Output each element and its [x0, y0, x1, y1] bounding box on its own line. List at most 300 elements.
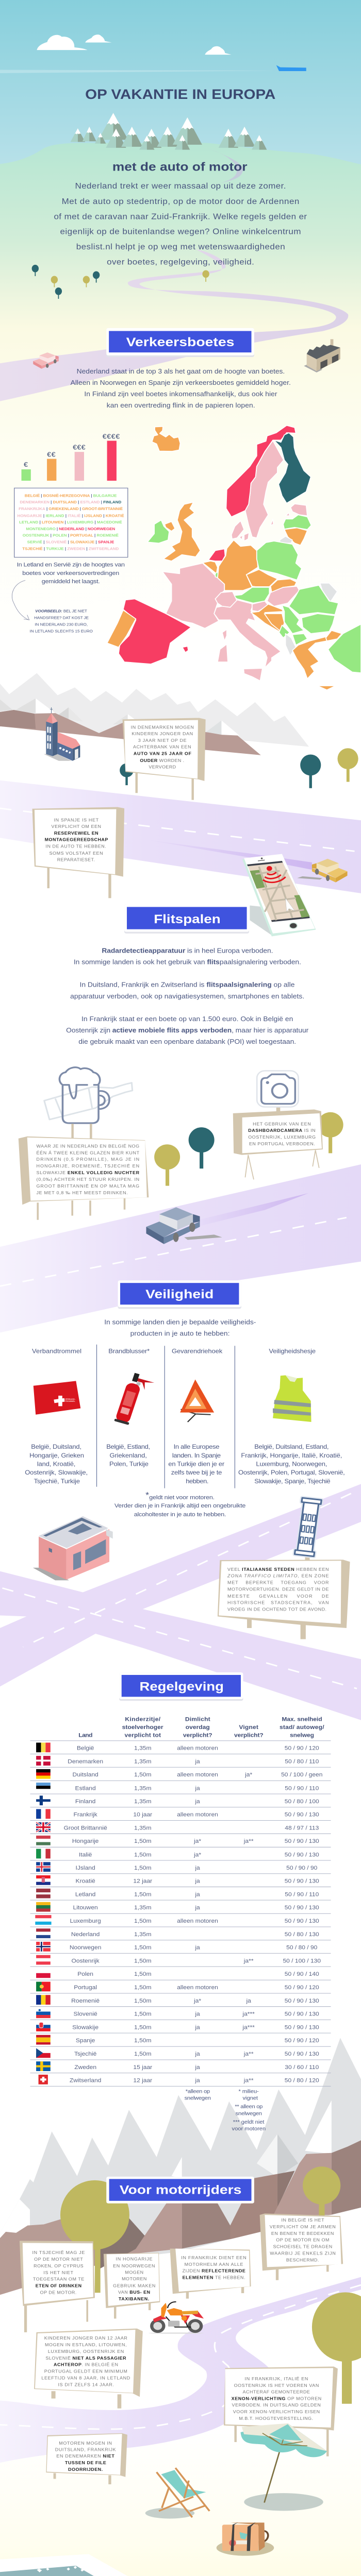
sign: flitspalen	[124, 905, 249, 934]
row: Portugal	[36, 1982, 319, 1991]
winding road near	[0, 249, 348, 401]
legend box: countries: FRANKRIJKA | GRIEKENLAND | GROOT-BRITTANNIË	[19, 507, 123, 511]
sign: xenon: VOOR XENON-VERLICHTING EISEN	[233, 2409, 320, 2414]
background: sky	[0, 0, 361, 178]
row: Hongarije: ja**	[243, 1839, 254, 1844]
column: verbandtrommel	[25, 1348, 88, 1485]
table footnote: vignet: *** geldt niet	[233, 2119, 265, 2125]
sign: hongarije: MOTOREN	[122, 2276, 146, 2281]
text: veiligheid intro: In sommige landen dien je bepaalde veiligheids-	[104, 1318, 256, 1326]
bar chart: boete level: €€€€	[103, 433, 120, 440]
row: Roemenië: Roemenië	[71, 1998, 100, 2004]
row: Italië: Italië	[79, 1852, 92, 1858]
sign: xenon: VERBODEN. IN DUITSLAND GELDEN	[232, 2402, 321, 2408]
row: Kroatië: Kroatië	[76, 1878, 95, 1885]
column: brandblusser: Polen, Turkije	[109, 1461, 149, 1467]
row: Spanje	[36, 2035, 319, 2045]
row: Portugal: Portugal	[74, 1985, 97, 1991]
row: Kroatië: 50 / 90 / 130	[285, 1878, 319, 1885]
sign: hongarije: TAXIBANEN.	[119, 2296, 149, 2301]
sign: alcohol: (0,0‰) ACHTER HET STUUR KRUIPEN. IN	[37, 1177, 139, 1182]
row: Italië: ja*	[193, 1852, 202, 1858]
text: radar detection: In sommige landen is ook het gebruik van flitspaalsignalering verboden.	[74, 958, 301, 965]
row: Zweden: Zweden	[74, 2064, 96, 2071]
column: veiligheidshesje: Oostenrijk, Polen, Portugal, Slovenië,	[238, 1469, 345, 1476]
sign: hongarije: EN NOORWEGEN	[113, 2263, 155, 2268]
row: Tsjechië: 1,50m	[134, 2052, 152, 2057]
sign: tsjechie: OP DE MOTOR NIET	[34, 2257, 84, 2262]
bar chart: boete level: €	[24, 461, 28, 468]
column dividers	[97, 1345, 235, 1488]
row: Frankrijk	[36, 1809, 319, 1819]
table header: Vignet	[239, 1724, 258, 1731]
row: Spanje: Spanje	[76, 2038, 95, 2044]
trees	[32, 265, 209, 299]
sign: frankrijk helm: ELEMENTEN TE HEBBEN.	[183, 2275, 245, 2280]
sign: regelgeving: Regelgeving	[140, 1680, 224, 1693]
icon: bottle	[44, 1083, 133, 1120]
header scene and intro	[0, 35, 361, 659]
sign: italie	[218, 1555, 350, 1639]
row: Frankrijk: Frankrijk	[74, 1812, 97, 1818]
row: Slovenië: Slovenië	[74, 2011, 97, 2018]
row: Estland: ja	[194, 1786, 200, 1791]
road crossing	[0, 1484, 361, 1720]
row: Hongarije: Hongarije	[72, 1839, 99, 1844]
text: lowest fines: gemiddeld het laagst.	[42, 578, 100, 585]
tree: right	[303, 2166, 340, 2216]
row: Denemarken: Denemarken	[68, 1759, 103, 1765]
sign: alcohol: ÉÉN Á TWEE KLEINE GLAZEN BIER KUNT	[37, 1150, 140, 1155]
row: Kroatië: ja	[194, 1878, 200, 1885]
sign: tsjechie: OP DE MOTOR.	[40, 2290, 76, 2295]
car trail	[150, 840, 312, 870]
panel: alcohol and dashcam	[0, 993, 361, 1333]
row: Groot Brittannië: Groot Brittannië	[63, 1825, 107, 1831]
sign: file: MOTOREN MOGEN IN	[59, 2441, 112, 2446]
tree: small teal	[120, 764, 134, 785]
text: flitspalen continued: In Frankrijk staat er een boete op van 1.500 euro. Ook in België en	[81, 1015, 293, 1023]
sign: dashcam: DASHBOARDCAMERA IS IN	[248, 1128, 316, 1133]
row: Slovenië: 50 / 90 / 130	[285, 2011, 319, 2018]
table header: stad/ autoweg/	[280, 1724, 324, 1731]
row: Finland: 1,35m	[134, 1799, 152, 1805]
row: Hongarije	[36, 1836, 319, 1845]
sign: italie: VROEG IN DE OCHTEND TOT DE AVOND.	[227, 1607, 326, 1612]
row: Noorwegen	[36, 1942, 317, 1952]
grey mountain range	[0, 673, 309, 747]
car: pink	[33, 352, 59, 369]
sign: hongarije: VAN BUS- EN	[118, 2290, 150, 2295]
row: Duitsland: 50 / 100 / geen	[281, 1772, 322, 1778]
road	[0, 781, 361, 893]
table header: Kinderzitje/	[125, 1717, 161, 1722]
sign: spanje: REPARATIESET.	[57, 857, 95, 862]
cloud left	[37, 35, 88, 50]
sign: dashcam: HET GEBRUIK VAN EEN	[253, 1122, 311, 1126]
row: Roemenië: 1,50m	[134, 1998, 152, 2004]
intro text: Nederland trekt er weer massaal op uit deze zomer.	[75, 182, 286, 191]
sign: italie: MOTORVOERTUIGEN. DEZE GELDT IN DE	[227, 1587, 329, 1592]
row: Slowakije: 1,50m	[134, 2025, 152, 2030]
sign: alcohol: SLOWAKIJE ENKEL VOLLEDIG NUCHTER	[37, 1170, 139, 1175]
sign: denemarken: 3 JAAR NIET OP DE	[138, 738, 187, 743]
row: Finland: 50 / 80 / 100	[285, 1799, 319, 1805]
row: IJsland: 1,50m	[134, 1865, 152, 1871]
cloud middle	[85, 35, 112, 42]
text: radar detection: Radardetectieapparatuur is in heel Europa verboden.	[102, 947, 273, 954]
row: Litouwen: Litouwen	[73, 1905, 98, 1911]
row: Luxemburg: Luxemburg	[70, 1919, 101, 1924]
sign: frankrijk helm	[170, 2248, 251, 2299]
table footnote: dimlicht	[185, 2089, 211, 2101]
icon: motorcycle	[149, 2302, 204, 2334]
row: Roemenië: 50 / 90 / 130	[285, 1998, 319, 2004]
row: Slowakije: ja	[194, 2025, 200, 2030]
icon: suitcase	[217, 2522, 274, 2556]
sign: frankrijk helm: MOTORHELM AAN ALLE	[185, 2262, 243, 2267]
column: veiligheidshesje: Slowakije, Spanje, Tsjechië	[254, 1478, 331, 1485]
row: Polen: Polen	[77, 1972, 93, 1977]
road markings	[2, 1494, 357, 1689]
sign: dashcam: EN PORTUGAL VERBODEN.	[249, 1141, 315, 1146]
row: Noorwegen: 1,50m	[134, 1945, 152, 1951]
title: OP VAKANTIE IN EUROPA	[85, 86, 275, 102]
text: flitspalen continued: Oostenrijk zijn actieve mobiele flits apps verboden, maar hier is apparatuur	[66, 1027, 309, 1034]
sign: kinderen achterop: LUXEMBURG, OOSTENRIJK EN	[48, 2349, 124, 2354]
intro text: over boetes, regelgeving, veiligheid.	[107, 258, 254, 266]
ground white	[0, 2208, 361, 2336]
table header: overdag	[186, 1724, 210, 1731]
column: veiligheidshesje: Luxemburg, Noorwegen,	[256, 1461, 327, 1467]
table header: snelweg	[290, 1733, 314, 1738]
row: Slowakije	[36, 2022, 319, 2031]
row: Nederland: 50 / 80 / 130	[285, 1931, 319, 1938]
column: verbandtrommel: België, Duitsland,	[31, 1444, 81, 1450]
table footnote: dimlicht: *alleen op	[186, 2089, 210, 2094]
sign: italie: ZONA TRAFFICO LIMITATO, EEN ZONE	[227, 1573, 329, 1579]
sign: frankrijk helm: ZIJDEN REFLECTERENDE	[183, 2268, 245, 2274]
sign: belgie: OP DE MOTOR EN OM	[276, 2238, 329, 2243]
row: Portugal: 50 / 90 / 120	[285, 1985, 319, 1991]
panel: mountains and flitspalen	[0, 673, 361, 988]
row: Zweden: 15 jaar	[133, 2064, 152, 2071]
sign: spanje: VERPLICHT OM EEN	[52, 824, 101, 829]
row: Frankrijk: 10 jaar	[133, 1812, 152, 1818]
foam spray	[37, 2566, 355, 2576]
table header: verplicht?	[183, 1733, 212, 1738]
intro text: beslist.nl helpt je op weg met wetenswaardigheden	[76, 243, 285, 251]
row: Estland: Estland	[75, 1786, 96, 1791]
sign: denemarken: KINDEREN JONGER DAN	[132, 731, 193, 736]
row: Groot Brittannië	[36, 1822, 319, 1832]
column: verbandtrommel: land, Kroatië,	[37, 1461, 75, 1467]
building pink	[33, 1516, 113, 1580]
panel: veiligheid	[0, 1318, 361, 1720]
column: gevarendriehoek: In alle Europese	[174, 1444, 220, 1450]
car: blue	[146, 1207, 222, 1244]
legend box: countries: SERVIË | SLOVENIË | SLOWAKIJE | SPANJE	[27, 540, 114, 545]
row: België	[36, 1742, 319, 1752]
row: Letland: ja	[194, 1892, 200, 1897]
row: IJsland	[36, 1862, 317, 1872]
row: Spanje: 50 / 90 / 120	[285, 2038, 319, 2044]
sign: belgie: EN BENEN TE BEDEKKEN	[271, 2231, 334, 2236]
row: Finland	[36, 1795, 319, 1805]
legend box: countries	[14, 488, 128, 557]
table header: verplicht?	[234, 1733, 264, 1738]
column: verbandtrommel: Verbandtrommel	[32, 1348, 81, 1354]
intro text: Met de auto op stedentrip, op de motor door de Ardennen	[62, 197, 299, 206]
row: Luxemburg	[35, 1915, 319, 1925]
sign: belgie: BESCHERMD.	[286, 2258, 319, 2262]
sign: kinderen achterop: KINDEREN JONGER DAN 12 JAAR	[44, 2335, 127, 2341]
text: flitspalen continued	[66, 993, 309, 1045]
row: IJsland: ja	[194, 1865, 200, 1871]
scene: alpine mountains	[0, 2038, 361, 2336]
car: yellow	[297, 859, 348, 883]
row: Estland: 50 / 90 / 110	[285, 1786, 319, 1791]
sea shallow	[0, 2566, 361, 2576]
row: Tsjechië: 50 / 90 / 130	[285, 2052, 319, 2057]
text: radar detection: In Duitsland, Frankrijk en Zwitserland is flitspaalsignalering op alle	[79, 981, 294, 988]
row: Duitsland: 1,50m	[134, 1772, 152, 1778]
subtitle: met de auto of motor	[112, 160, 247, 174]
sign: alcohol: JE MET 0,8 ‰ HET MEEST DRINKEN.	[37, 1190, 128, 1195]
sign: frankrijk helm: IN FRANKRIJK DIENT EEN	[181, 2255, 247, 2260]
sign: regelgeving	[119, 1672, 243, 1701]
row: Duitsland: Duitsland	[73, 1772, 99, 1778]
table footnote: vignet: * milieu-	[239, 2089, 259, 2094]
text: lowest fines: boetes voor verkeersovertredingen	[22, 569, 119, 577]
bar chart: boete level: €€	[47, 451, 56, 458]
icon: camera	[257, 1071, 299, 1113]
sign: xenon: ACHTERAF GEMONTEERDE	[243, 2389, 310, 2395]
row: Denemarken: 1,35m	[134, 1759, 152, 1765]
row: Spanje: 1,50m	[134, 2038, 152, 2044]
row: Letland	[36, 1889, 319, 1898]
footnote: *	[145, 1490, 149, 1500]
row: Hongarije: 1,50m	[134, 1839, 152, 1844]
row: Tsjechië: Tsjechië	[74, 2052, 96, 2057]
table header: Max. snelheid	[282, 1717, 322, 1722]
row: Zwitserland	[39, 2075, 319, 2084]
row: Hongarije: ja*	[193, 1839, 202, 1844]
sign: kinderen achterop: PORTUGAL GELDT EEN MINIMUM	[44, 2369, 127, 2374]
text: flitspalen continued: die gebruik maakt van een openbare databank (POI) wel toegestaan.	[78, 1038, 296, 1045]
bar chart: boete level: €€€	[73, 444, 86, 451]
sign: belgie	[260, 2213, 343, 2280]
text: boetes intro	[71, 367, 291, 409]
text: boetes intro: In Finland zijn veel boetes inkomensafhankelijk, dus ook hier	[84, 391, 277, 398]
sign: veiligheid: Veiligheid	[145, 1287, 214, 1301]
row: Hongarije: 50 / 90 / 130	[285, 1839, 319, 1844]
sign: kinderen achterop: LEEFTIJD VAN 8 JAAR, IN LETLAND	[41, 2376, 130, 2380]
column: brandblusser: België, Estland,	[106, 1444, 150, 1450]
sign: spanje: MONTAGEGEREEDSCHAP	[45, 837, 108, 842]
row: Groot Brittannië: 48 / 97 / 113	[285, 1825, 319, 1831]
brown mountains	[0, 710, 261, 755]
arrow: example	[12, 581, 29, 620]
text: veiligheid intro	[104, 1318, 256, 1337]
sign: alcohol: GROOT BRITTANNIË EN OP MALTA MAG	[37, 1183, 139, 1189]
row: Portugal: alleen motoren	[177, 1985, 218, 1991]
text: boetes intro: Nederland staat in de top 3 als het gaat om de hoogte van boetes.	[77, 367, 285, 375]
row: Noorwegen: Noorwegen	[70, 1945, 101, 1951]
row: IJsland: IJsland	[76, 1865, 95, 1871]
sign: denemarken	[123, 718, 206, 800]
sign: dashcam	[233, 1109, 323, 1179]
row: Groot Brittannië: 1,35m	[134, 1825, 152, 1831]
text: voorbeeld: IN NEDERLAND 230 EURO,	[35, 622, 88, 626]
table header	[78, 1717, 324, 1738]
table footnote: dimlicht: snelwegen	[185, 2095, 211, 2101]
table header: stoelverhoger	[122, 1724, 163, 1731]
row: Frankrijk: 50 / 90 / 130	[285, 1812, 319, 1818]
grey peaks	[0, 699, 140, 725]
row: Litouwen: 1,35m	[134, 1905, 152, 1911]
sign: hongarije: MOGEN	[125, 2270, 143, 2275]
sign: xenon: IN FRANKRIJK, ITALIË EN	[245, 2376, 308, 2381]
sign: tsjechie: TOEGESTAAN OM TE	[33, 2277, 85, 2281]
row: Portugal: 1,50m	[134, 1985, 152, 1991]
sign: belgie: VERPLICHT OM JE ARMEN	[270, 2224, 336, 2229]
row: Litouwen: ja	[194, 1905, 200, 1911]
row: Letland: 1,50m	[134, 1892, 152, 1897]
column: gevarendriehoek: en Turkije dien je er	[168, 1461, 224, 1467]
column: gevarendriehoek: Gevarendriehoek	[172, 1348, 223, 1354]
sign: veiligheid	[118, 1280, 241, 1309]
row: Roemenië	[36, 1995, 319, 2005]
intro text: of met de caravan naar Zuid-Frankrijk. Welke regels gelden er	[54, 212, 307, 221]
row: Letland: Letland	[75, 1892, 95, 1897]
brown mountain shade	[0, 710, 36, 729]
row: Noorwegen: ja	[194, 1945, 200, 1951]
row: Luxemburg: 50 / 90 / 130	[285, 1919, 319, 1924]
sign: flitspalen: Flitspalen	[154, 912, 221, 926]
row: Frankrijk: alleen motoren	[177, 1812, 218, 1818]
row: Zwitserland: ja**	[243, 2078, 254, 2083]
table footnote: vignet: voor motoren	[232, 2126, 266, 2132]
sign: kinderen achterop: MOGEN IN ESTLAND, LITOUWEN,	[45, 2342, 127, 2347]
sign: file: DOORRIJDEN.	[68, 2467, 103, 2472]
column: brandblusser: Griekenland,	[110, 1452, 147, 1459]
footnote: geldt niet voor motoren.	[149, 1494, 215, 1501]
sign: belgie: IN BELGIË IS HET	[282, 2217, 324, 2223]
sign: denemarken: OUDER WORDEN .	[140, 758, 184, 763]
row: België: 50 / 90 / 120	[285, 1745, 319, 1752]
row: Estland: 1,35m	[134, 1786, 152, 1791]
sign: spanje: SOMS VOLSTAAT EEN	[50, 851, 103, 856]
sign: spanje	[32, 807, 124, 898]
table header: verplicht tot	[125, 1733, 161, 1738]
sign: italie: MET BEPERKTE TOEGANG VOOR	[227, 1580, 329, 1585]
row: Denemarken	[36, 1756, 319, 1766]
row: Estland	[36, 1783, 319, 1791]
sign: denemarken: AUTO VAN 25 JAAR OF	[134, 751, 191, 756]
sign: alcohol: DRINKEN (0,5 PROMILLE), MAG JE IN	[37, 1157, 139, 1162]
row: Zweden: 30 / 60 / 110	[285, 2064, 319, 2071]
legend box: countries: TSJECHIË | TURKIJE | ZWEDEN | ZWITSERLAND	[22, 547, 119, 551]
sign: kinderen achterop: ACHTEROP. IN BELGIË EN	[54, 2362, 118, 2367]
table header: Dimlicht	[185, 1717, 210, 1722]
table footnote: vignet: snelwegen	[236, 2111, 262, 2116]
intro text	[54, 182, 307, 266]
row: Oostenrijk: 1,50m	[134, 1958, 152, 1964]
row: Luxemburg: alleen motoren	[177, 1919, 218, 1924]
sky streak	[0, 70, 276, 73]
sign: tsjechie: IS HET NIET	[43, 2270, 74, 2275]
sign: tsjechie: ETEN OF DRINKEN	[36, 2283, 81, 2288]
row: Slowakije: Slowakije	[72, 2025, 99, 2030]
legend box: countries: LETLAND | LITOUWEN | LUXEMBURG | MACEDONIË	[19, 520, 122, 524]
row: Oostenrijk: 50 / 100 / 130	[283, 1958, 321, 1964]
sign: italie: HISTORISCHE STADSCENTRA, VAN	[227, 1600, 329, 1605]
row: Oostenrijk: Oostenrijk	[72, 1958, 100, 1964]
column: gevarendriehoek: hebben.	[186, 1478, 208, 1485]
row: Slovenië	[36, 2009, 319, 2018]
text: flitspalen continued: apparatuur verboden, ook op navigatiesystemen, smartphones en tablets.	[70, 993, 304, 1000]
row: Duitsland	[36, 1769, 322, 1779]
row: Slowakije: ja***	[242, 2025, 255, 2030]
row: Zwitserland: 12 jaar	[133, 2078, 152, 2083]
row: Noorwegen: 50 / 80 / 90	[286, 1945, 317, 1951]
sign: denemarken: ACHTERBANK VAN EEN	[133, 744, 191, 750]
row: Polen	[36, 1972, 319, 1978]
panel: motorrijders continued and beach	[0, 2277, 361, 2576]
row: Italië: 50 / 90 / 130	[285, 1852, 319, 1858]
sign: xenon	[224, 2366, 338, 2456]
sign: xenon: M.B.T. HOOGTEVERSTELLING.	[239, 2416, 313, 2421]
row: Zwitserland: 50 / 80 / 120	[285, 2078, 319, 2083]
sign: voor motorrijders: Voor motorrijders	[120, 2183, 241, 2197]
row: Tsjechië: ja	[194, 2052, 200, 2057]
bar chart: boete level	[22, 433, 120, 481]
row: Denemarken: 50 / 80 / 110	[285, 1759, 319, 1765]
row: Finland: Finland	[75, 1799, 95, 1805]
row: Roemenië: ja*	[193, 1998, 202, 2004]
snow areas	[0, 2100, 332, 2239]
row: Zweden	[36, 2061, 319, 2071]
row: Polen: 1,50m	[134, 1972, 152, 1977]
column: gevarendriehoek: landen. In Spanje	[172, 1452, 221, 1459]
row: Zwitserland: Zwitserland	[70, 2078, 101, 2083]
row: Kroatië: 12 jaar	[133, 1878, 152, 1885]
row: Duitsland: ja*	[244, 1772, 253, 1778]
column: verbandtrommel: Oostenrijk, Slowakije,	[25, 1469, 88, 1476]
text: radar detection	[74, 947, 301, 988]
row: Letland: 50 / 90 / 110	[285, 1892, 319, 1897]
legend box: countries: DENEMARKEN | DUITSLAND | ESTLAND | FINLAND	[20, 500, 122, 504]
road winding	[0, 2277, 361, 2463]
icon: phone with speed camera app	[242, 854, 316, 937]
sign: italie: VEEL ITALIAANSE STEDEN HEBBEN EEN	[227, 1567, 329, 1572]
row: Nederland: 1,35m	[134, 1931, 152, 1938]
trees middle	[154, 1112, 343, 1186]
row: Nederland: Nederland	[71, 1931, 100, 1938]
sign: xenon: XENON-VERLICHTING OP MOTOREN	[232, 2396, 321, 2401]
sign: belgie: WAARBIJ JE ENKELS ZIJN	[270, 2251, 336, 2256]
column: brandblusser: Brandblusser*	[108, 1348, 150, 1354]
sign: alcohol: HONGARIJE, ROEMENIË, TSJECHIË EN	[37, 1163, 139, 1168]
church	[44, 707, 80, 761]
sign: denemarken: IN DENEMARKEN MOGEN	[131, 725, 194, 730]
row: Luxemburg: 1,50m	[134, 1919, 152, 1924]
car trail	[198, 1193, 308, 1226]
icon: parasol	[241, 2424, 327, 2511]
icon: tower of pisa	[294, 1498, 321, 1556]
icon: factory	[304, 339, 340, 372]
